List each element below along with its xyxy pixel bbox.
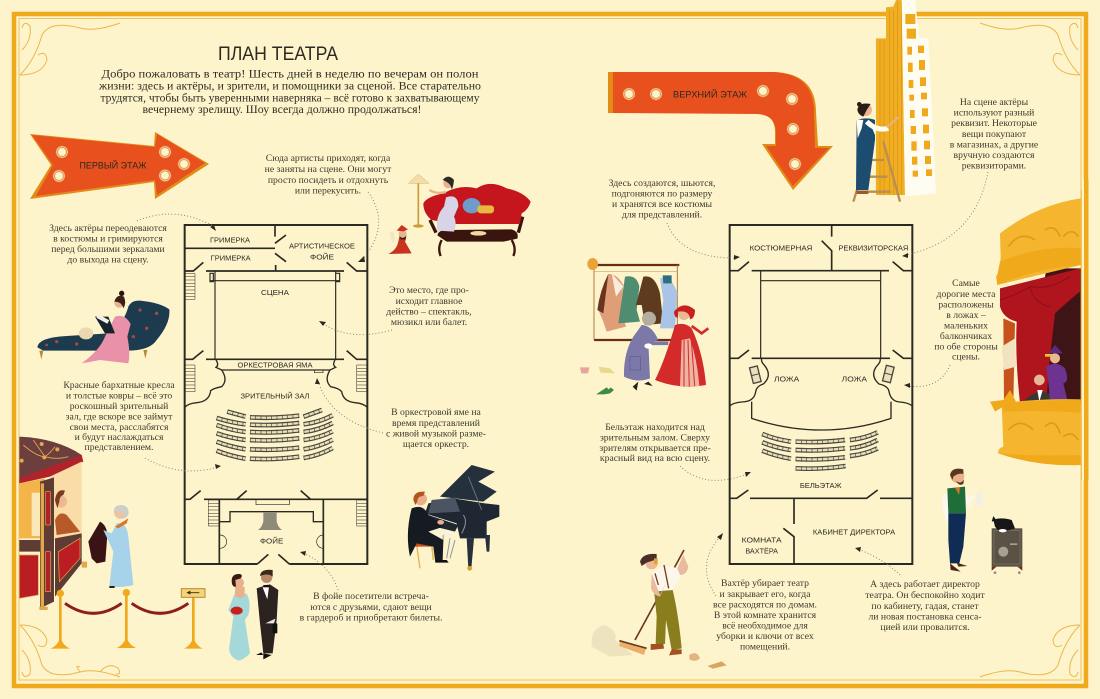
callout: balcony (599, 422, 711, 464)
callout: artists foyer: не заняты на сцене. Они могут (265, 164, 392, 175)
callout: boxes: Самые (952, 278, 980, 289)
illustration: couple in foyer (228, 570, 278, 661)
callout: dressing rooms: перед большими зеркалами (51, 244, 165, 255)
callout: props: реквизиторами. (962, 160, 1026, 172)
callout: boxes: балкончиках (940, 331, 992, 342)
callout: props: На сцене актёры (960, 97, 1029, 108)
floor plan: first floor: ФОЙЕ (260, 536, 283, 545)
callout: caretaker: В этой комнате хранится (714, 610, 817, 621)
intro text (98, 68, 481, 116)
illustration: director and safe with cat (942, 469, 1022, 574)
callout: auditorium: роскошный зрительный (70, 401, 168, 412)
callout: props: реквизит. Некоторые (951, 118, 1037, 129)
frame overlay on box edge (1081, 180, 1100, 480)
callout: foyer: В фойе посетители встреча- (313, 591, 429, 602)
floor plan: upper floor: РЕКВИЗИТОРСКАЯ (838, 244, 908, 253)
callout: caretaker: уборки и ключи от всех (716, 631, 814, 642)
seats (217, 410, 333, 459)
callout: orchestra pit: щается оркестр. (403, 439, 469, 450)
callout: props (950, 97, 1038, 172)
callout: balcony: зрителям открывается пре- (599, 443, 711, 454)
arrow sign: upper floor (608, 72, 833, 190)
floor plan: upper floor: БЕЛЬЭТАЖ (800, 481, 842, 490)
callout: foyer: в гардероб и приобретают билеты. (300, 612, 442, 624)
callout: stage: действо – спектакль, (386, 306, 472, 318)
illustration: caretaker with broom (592, 550, 727, 669)
floor plan: first floor: ФОЙЕ (310, 252, 334, 261)
callout: balcony: Бельэтаж находится над (605, 422, 705, 433)
floor plan: upper floor: ЛОЖА (842, 375, 867, 384)
illustration: painter and scenery (853, 0, 936, 202)
callout: dressing rooms: до выхода на сцену. (67, 254, 149, 266)
callout: director: по кабинету, гадая, станет (871, 601, 979, 612)
floor plan: upper floor: ЛОЖА (774, 375, 799, 384)
floor plan: first floor: СЦЕНА (261, 288, 289, 297)
callout: stage (386, 285, 472, 328)
callout: boxes: расположены (938, 300, 994, 310)
callout: artists foyer: Сюда артисты приходят, когда (266, 153, 391, 164)
intro text: вечернему зрелищу. Шоу всегда должно продолжаться! (142, 103, 422, 116)
callout: auditorium: Красные бархатные кресла (63, 380, 175, 391)
callout: balcony: зрительным залом. Сверху (600, 432, 710, 444)
callout: caretaker: и закрывает его, когда (720, 589, 811, 600)
arrow sign: upper floor: ВЕРХНИЙ ЭТАЖ (673, 88, 747, 100)
illustration: coat rack and dressmaker (580, 258, 708, 394)
callout: boxes: по обе стороны (934, 342, 998, 352)
floor plan: first floor (185, 225, 367, 564)
callout: boxes: дорогие места (937, 289, 996, 300)
callout: auditorium: и толстые ковры – всё это (66, 390, 172, 402)
floor plan: upper floor (730, 225, 912, 564)
callout: orchestra pit: В оркестровой яме на (391, 407, 482, 418)
callout: balcony: красный вид на всю сцену. (600, 453, 710, 464)
callout: costume room: подгоняются по размеру (612, 188, 713, 200)
arrow sign: first floor: ПЕРВЫЙ ЭТАЖ (80, 160, 147, 172)
callout: auditorium: представлением. (85, 442, 153, 453)
intro text: трудятся, чтобы быть уверенными наверняка – всё готово к захватывающему (100, 92, 480, 104)
callout: director (865, 579, 985, 633)
callout: caretaker: всё необходимое для (722, 620, 808, 632)
seats (762, 432, 878, 469)
callout: director: А здесь работает директор (870, 579, 980, 590)
callout: stage: мюзикл или балет. (391, 317, 467, 328)
floor plan: upper floor: КОСТЮМЕРНАЯ (750, 244, 812, 253)
callout: auditorium: свои места, расслабятся (70, 422, 169, 433)
callout: props: используют разный (954, 108, 1034, 118)
callout: props: в магазинах, а другие (950, 140, 1038, 150)
callout: boxes: маленьких (944, 320, 988, 332)
callout: orchestra pit: время представлений (392, 418, 480, 429)
callout: auditorium: и будут наслаждаться (75, 432, 164, 443)
floor plan: first floor: ГРИМЕРКА (210, 236, 250, 245)
illustration: actress on chaise (37, 291, 169, 363)
callout: dressing rooms: в костюмы и гримируются (53, 234, 163, 244)
callout: director: театра. Он беспокойно ходит (865, 590, 985, 601)
callout: dressing rooms (49, 223, 167, 266)
illustration: theatre box (990, 198, 1081, 465)
callout: stage: исходит главное (396, 296, 462, 307)
callout: auditorium: зал, где вскоре все займут (66, 412, 173, 422)
intro text: Добро пожаловать в театр! Шесть дней в неделю по вечерам он полон (102, 68, 478, 80)
floor plan: first floor: ОРКЕСТРОВАЯ ЯМА (237, 361, 312, 370)
floor plan: upper floor: КАБИНЕТ ДИРЕКТОРА (813, 527, 895, 536)
callout: caretaker: Вахтёр убирает театр (721, 578, 809, 589)
callout: costume room: для представлений. (622, 210, 702, 220)
illustration: pianist at grand piano (408, 465, 499, 571)
floor plan: first floor: ЗРИТЕЛЬНЫЙ ЗАЛ (240, 392, 310, 401)
callout: stage: Это место, где про- (389, 285, 469, 296)
callout: caretaker: помещений. (740, 642, 790, 652)
callout: costume room: и хранятся все костюмы (612, 199, 712, 210)
intro text: жизни: здесь и актёры, и зрители, и помощники за сценой. Все старательно (98, 80, 481, 92)
callout: orchestra pit: с живой музыкой разме- (386, 428, 486, 440)
callout: caretaker (713, 578, 817, 652)
illustration: kiosk, cloakroom attendant and rope barrier (19, 437, 205, 649)
callout: props: вещи покупают (962, 129, 1027, 140)
callout: artists foyer: или перекусить. (295, 186, 361, 196)
callout: foyer (300, 591, 442, 624)
callout: costume room: Здесь создаются, шьются, (609, 178, 715, 189)
callout: caretaker: все расходятся по домам. (713, 600, 817, 610)
stairs (185, 273, 367, 526)
floor plan: first floor: АРТИСТИЧЕСКОЕ (289, 242, 355, 251)
callout: boxes: сцены. (952, 352, 980, 362)
callout: dressing rooms: Здесь актёры переодеваются (49, 223, 167, 234)
callout: foyer: ются с друзьями, сдают вещи (310, 602, 432, 613)
floor plan: upper floor: ВАХТЁРА (745, 546, 778, 555)
callout: props: вручную создаются (954, 150, 1035, 161)
callout: artists foyer: просто посидеть и отдохнуть (268, 175, 389, 186)
callout: boxes (934, 278, 998, 362)
arrow sign: first floor (30, 132, 209, 199)
callout: costume room (609, 178, 715, 220)
callout: artists foyer (265, 153, 392, 196)
callout: director: цией или провалится. (880, 622, 970, 633)
callout: auditorium (63, 380, 175, 453)
callout: boxes: в ложах – (946, 310, 986, 321)
callout: director: ли новая постановка сенса- (868, 612, 982, 622)
illustration: sofa and table (388, 174, 531, 256)
callout: orchestra pit (386, 407, 486, 450)
floor plan: upper floor: КОМНАТА (742, 536, 782, 545)
dotted connectors (137, 172, 988, 596)
floor plan: first floor: ГРИМЕРКА (211, 253, 251, 262)
title: ПЛАН ТЕАТРА (218, 44, 338, 65)
